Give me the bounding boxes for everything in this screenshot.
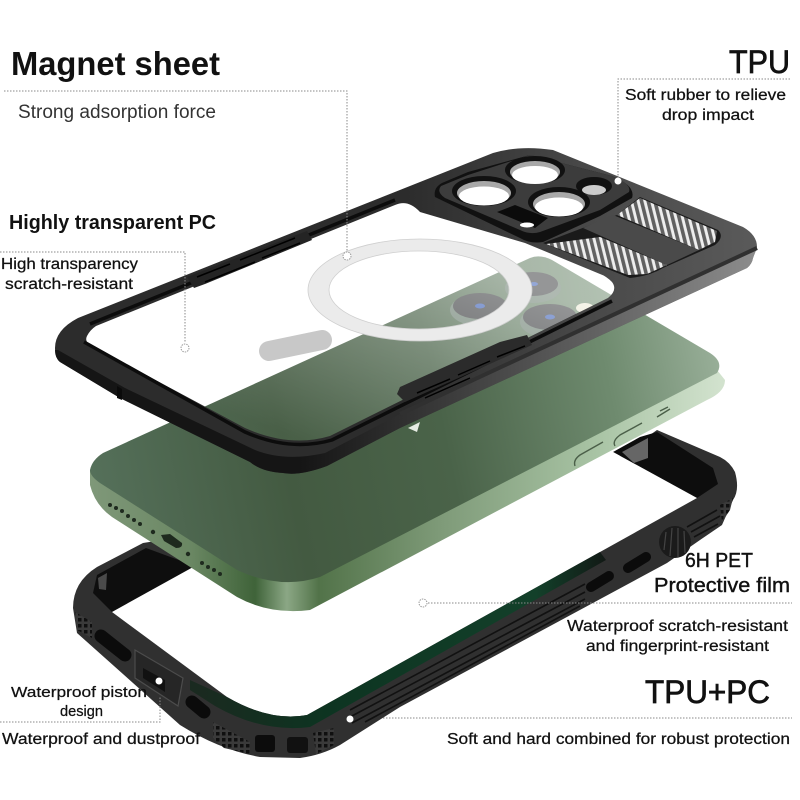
label: 6H PET: and fingerprint-resistant bbox=[586, 638, 770, 655]
label: highly transparent PC: scratch-resistant bbox=[5, 276, 134, 293]
label: waterproof piston: design bbox=[60, 703, 103, 720]
label: 6H PET: Waterproof scratch-resistant bbox=[567, 618, 789, 635]
camera lenses seen through the case bbox=[450, 272, 594, 338]
label: TPU: drop impact bbox=[662, 107, 755, 124]
camera island bbox=[435, 155, 633, 242]
label: 6H PET: 6H PET bbox=[685, 550, 753, 572]
knob bbox=[659, 526, 691, 558]
label: TPU+PC: Soft and hard combined for robust protection bbox=[447, 731, 790, 748]
label: magnet sheet: Strong adsorption force bbox=[18, 102, 216, 123]
speaker and charging port bbox=[108, 503, 222, 576]
label: TPU+PC bbox=[447, 674, 790, 748]
rib lines bbox=[350, 510, 720, 723]
label: 6H PET: Protective film bbox=[654, 575, 790, 597]
leader: piston bbox=[0, 678, 162, 722]
label: waterproof piston bbox=[2, 684, 201, 748]
label: highly transparent PC: Highly transparent PC bbox=[9, 211, 216, 234]
label: highly transparent PC: High transparency bbox=[1, 256, 138, 273]
waterproof piston bbox=[135, 650, 183, 706]
leader: magnet sheet bbox=[4, 91, 351, 260]
label: waterproof piston: Waterproof and dustproof bbox=[2, 731, 201, 748]
frame outer side bbox=[55, 248, 757, 474]
leader: TPU bbox=[614, 79, 790, 184]
camera hatch panel bbox=[543, 197, 721, 278]
magnet ring bbox=[308, 239, 532, 341]
label: TPU+PC: TPU+PC bbox=[645, 674, 770, 710]
raised side strips with slots bbox=[187, 231, 532, 402]
side buttons bbox=[575, 407, 670, 466]
port slots bbox=[101, 557, 646, 712]
phone: iPhone rear bbox=[90, 256, 725, 611]
frame face bbox=[55, 148, 757, 474]
label: TPU: TPU bbox=[729, 44, 790, 80]
magnet pill bbox=[269, 340, 322, 351]
leader: 6H PET bbox=[419, 599, 792, 607]
label: TPU bbox=[625, 44, 790, 124]
label: TPU: Soft rubber to relieve bbox=[625, 87, 786, 104]
label: magnet sheet: Magnet sheet bbox=[11, 45, 220, 82]
apple logo bbox=[408, 422, 420, 432]
label: 6H PET bbox=[567, 550, 790, 655]
lens cutouts bbox=[452, 156, 612, 217]
flash cutout bbox=[497, 205, 548, 228]
leader: TPU+PC bbox=[346, 716, 792, 722]
label: waterproof piston: Waterproof piston bbox=[11, 684, 147, 701]
label: magnet sheet bbox=[11, 45, 220, 123]
top frame: TPU bumper with transparent PC bbox=[55, 148, 757, 474]
inner ridges bbox=[84, 200, 612, 444]
grip textures bbox=[75, 498, 733, 754]
bottom frame: TPU+PC bumper bbox=[73, 430, 737, 758]
leader: highly transparent PC bbox=[0, 252, 189, 352]
label: highly transparent PC bbox=[1, 211, 216, 293]
